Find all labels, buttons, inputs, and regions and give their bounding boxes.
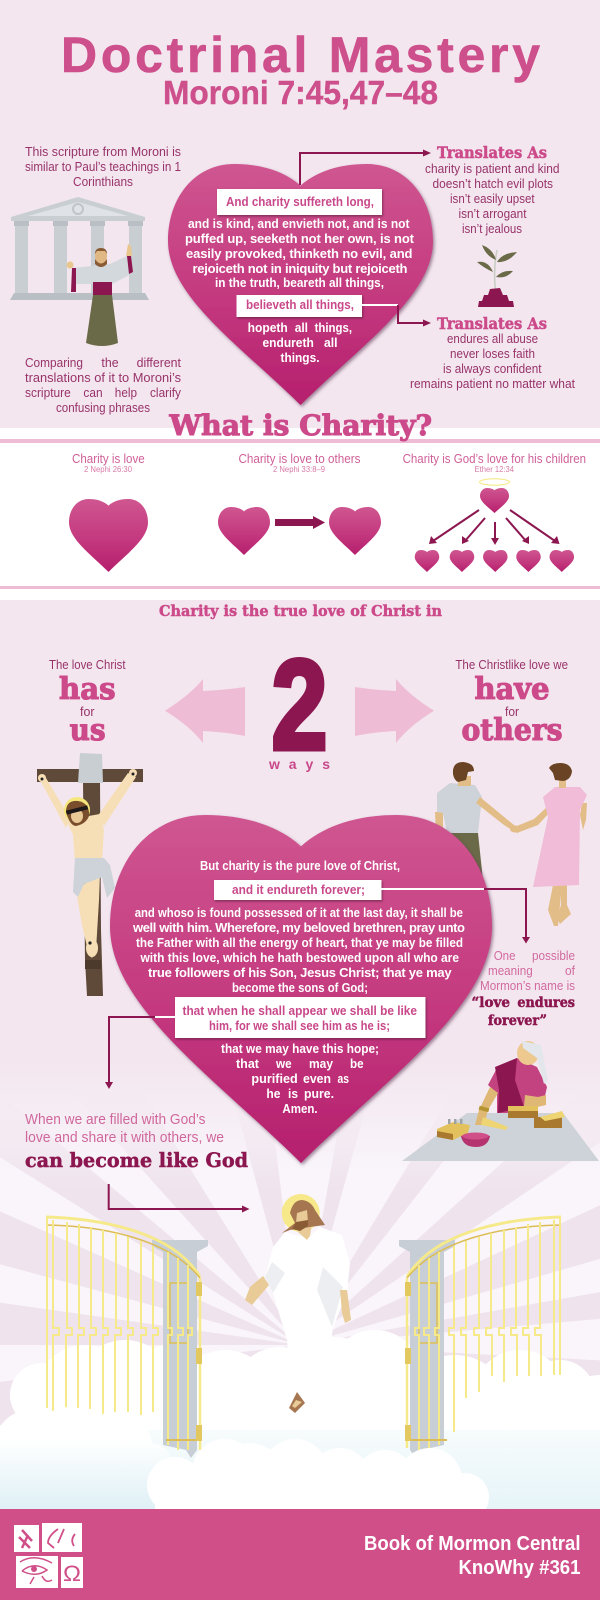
text block: scripture from Moroni: Corinthians [73, 174, 133, 189]
text block: meaning of Mormon's name: possible [532, 948, 575, 963]
verse text [221, 1041, 379, 1116]
verse text: Amen. [282, 1101, 318, 1116]
verse text: pure. [304, 1086, 334, 1101]
verse text [132, 905, 465, 995]
column: charity is love to others: 2 Nephi 33:8–9 [273, 465, 326, 474]
text block: meaning of Mormon's name: One [494, 948, 516, 963]
translation block one: charity is patient and kind [425, 161, 560, 176]
verse text: puffed up, seeketh not her own, is not [185, 231, 415, 246]
highlighted phrase box [214, 880, 382, 900]
text block: comparing translations: can [83, 385, 103, 400]
verse text: and is kind, and envieth not, and is not [188, 216, 410, 231]
verse text: purified [251, 1071, 298, 1086]
verse text: that we may have this hope; [221, 1041, 379, 1056]
verse text: rejoiceth not in iniquity but rejoiceth [192, 261, 408, 276]
text block: can become like God: When we are filled with God’s [25, 1111, 206, 1128]
text block: comparing translations [25, 355, 181, 415]
translation block two: remains patient no matter what [410, 376, 575, 391]
verse text: true followers of his Son, Jesus Christ; that ye may [148, 965, 452, 980]
band rule bottom [0, 586, 600, 589]
column: charity is God's love [403, 451, 586, 572]
text block: Christlike love we have for others: for [505, 704, 520, 719]
icon: resurrected Christ in white robe [245, 1194, 351, 1413]
text block: meaning of Mormon's name: Mormon’s name is [480, 978, 575, 993]
highlighted phrase box: and it endureth forever; [232, 882, 365, 897]
gold panel [170, 1283, 188, 1343]
highlighted phrase box: believeth all things, [246, 297, 354, 312]
bars [47, 1217, 200, 1450]
column: charity is love to others: Charity is love to others [238, 451, 361, 466]
highlighted phrase box: And charity suffereth long, [226, 194, 374, 209]
text block: scripture from Moroni [25, 144, 181, 189]
heart shape [110, 815, 492, 1163]
text block: love Christ has for us: The love Christ [49, 657, 126, 672]
footer text: KnoWhy #361 [458, 1557, 580, 1579]
big number two: ways [268, 756, 330, 772]
woman [510, 763, 587, 926]
title: Moroni 7:45,47–48 [163, 74, 438, 111]
heart panel: pure love of Christ [110, 815, 492, 1163]
verse text: that [236, 1056, 260, 1071]
arrow: right [355, 679, 434, 743]
text block: scripture from Moroni: similar to Paul’s teachings in 1 [25, 159, 181, 174]
arrow: second phrase to second translation [362, 305, 431, 326]
column: charity is love to others [218, 451, 381, 555]
text block: scripture from Moroni: This scripture from Moroni is [25, 144, 181, 159]
translation block two: never loses faith [450, 346, 535, 361]
table [402, 1113, 599, 1161]
highlighted phrase box: him, for we shall see him as he is; [209, 1018, 390, 1033]
text block: meaning of Mormon's name [472, 948, 575, 1029]
sleeves [265, 1262, 285, 1293]
icon: Christ on the cross [37, 753, 143, 996]
highlighted phrase box [175, 997, 426, 1038]
column: charity is love [69, 451, 148, 572]
text block: can become like God [25, 1111, 248, 1172]
arrow: to Christ in heaven [109, 1184, 250, 1212]
verse text: and whoso is found possessed of it at the last day, it shall be [135, 905, 463, 920]
verse text: But charity is the pure love of Christ, [200, 858, 400, 873]
verse text: well with him. Wherefore, my beloved brethren, pray unto [132, 920, 465, 935]
text block: love Christ has for us: has [59, 672, 116, 707]
text block: can become like God: love and share it with others, we [25, 1129, 224, 1146]
verse text: easily provoked, thinketh no evil, and [186, 246, 413, 261]
neck, hair and face [298, 1222, 312, 1240]
footer text [364, 1533, 580, 1579]
highlighted phrase box [217, 189, 382, 215]
column: charity is love: Charity is love [72, 451, 145, 466]
text block: comparing translations: the [101, 355, 119, 370]
arrow: left [165, 679, 245, 743]
text block: comparing translations: different [137, 355, 181, 370]
heaven background: sky and rays [0, 898, 600, 1462]
translation block one: isn’t jealous [462, 221, 522, 236]
clouds behind gates [0, 1330, 600, 1509]
icon: scribe writing at a table [402, 1041, 599, 1161]
verse text: become the sons of God; [232, 980, 368, 995]
highlighted phrase box: that when he shall appear we shall be like [182, 1003, 417, 1018]
text block: comparing translations: confusing phrases [56, 400, 150, 415]
text block: meaning of Mormon's name: “love [472, 995, 510, 1011]
text block: Christlike love we have for others: others [462, 713, 562, 748]
translation block one [425, 143, 560, 236]
logo [14, 1523, 83, 1588]
icon: temple with columns [10, 197, 149, 300]
clouds in front [0, 1407, 172, 1509]
verse text: even [303, 1071, 331, 1086]
text block: love Christ has for us: us [70, 713, 106, 748]
verse text: be [350, 1056, 364, 1071]
translation block one: Translates As [437, 143, 547, 162]
text block: Christlike love we have for others: The Christlike love we [455, 657, 568, 672]
verse text: as [338, 1071, 349, 1086]
text block: meaning of Mormon's name: forever” [488, 1013, 547, 1029]
text block: comparing translations: Comparing [25, 355, 83, 370]
text block: love Christ has for us [49, 657, 126, 748]
cloud in front, centre [147, 1439, 489, 1521]
footer bar [0, 1509, 600, 1600]
heart panel: charity suffereth long [168, 164, 433, 405]
column: charity is love: 2 Nephi 26:30 [84, 465, 133, 474]
translation block one: doesn’t hatch evil plots [432, 176, 553, 191]
title [61, 27, 540, 111]
arrow: phrase to become like God [105, 1017, 175, 1089]
column: charity is God's love: Ether 12:34 [474, 465, 515, 474]
translation block one: isn’t arrogant [458, 206, 527, 221]
translation block two: is always confident [443, 361, 542, 376]
white band [0, 428, 600, 600]
man [435, 762, 519, 890]
verse text: things, [315, 320, 352, 335]
text block: comparing translations: help [115, 385, 137, 400]
highlighted phrase box [236, 295, 362, 317]
logo: Ω [63, 1561, 81, 1586]
verse text: the Father with all the energy of heart, that ye may be filled [136, 935, 463, 950]
gate: right [399, 1217, 561, 1458]
verse text: he [266, 1086, 280, 1101]
text block: Christlike love we have for others [455, 657, 568, 748]
translation block two: Translates As [437, 314, 547, 333]
verse text: all [295, 320, 308, 335]
icon: couple holding hands [435, 762, 587, 926]
robe [265, 1227, 350, 1400]
text block: meaning of Mormon's name: meaning [488, 963, 533, 978]
hands [245, 1276, 269, 1305]
heart shape [168, 164, 433, 405]
sandal [289, 1392, 305, 1413]
panel: what is charity [0, 409, 600, 600]
halo [282, 1194, 320, 1232]
pillar [152, 1240, 208, 1458]
arrow: heart to first translation [300, 150, 431, 185]
big number two: 2 [272, 634, 328, 777]
text block: meaning of Mormon's name: of [565, 963, 575, 978]
verse text: in the truth, beareth all things, [215, 275, 384, 290]
band rule top [0, 439, 600, 443]
verse text [185, 216, 415, 290]
translation block two [410, 314, 575, 391]
text block: comparing translations: scripture [25, 385, 71, 400]
translation block two: endures all abuse [447, 331, 538, 346]
verse text: may [309, 1056, 334, 1071]
verse text: all [324, 335, 338, 350]
gate: left [46, 1217, 208, 1458]
text block: comparing translations: clarify [150, 385, 181, 400]
subheading: true love of Christ: Charity is the true love of Christ in [159, 602, 442, 620]
heading: What is Charity? [168, 409, 432, 442]
figure [488, 1058, 547, 1113]
title: Doctrinal Mastery [61, 27, 540, 83]
text block: can become like God: can become like God [25, 1148, 248, 1172]
verse text: is [288, 1086, 298, 1101]
icon: seedling in soil [477, 245, 517, 307]
verse text: with this love, which he hath bestowed upon all who are [140, 950, 459, 965]
verse text: things. [280, 350, 320, 365]
books and bowl [437, 1122, 470, 1140]
icon: Paul preaching [66, 244, 133, 346]
footer text: Book of Mormon Central [364, 1533, 580, 1555]
text block: meaning of Mormon's name: endures [517, 995, 575, 1011]
top rail [46, 1217, 200, 1277]
text block: love Christ has for us: for [80, 704, 95, 719]
verse text: we [275, 1056, 292, 1071]
verse text: hopeth [248, 320, 288, 335]
translation block one: isn’t easily upset [450, 191, 535, 206]
verse text: endureth [262, 335, 314, 350]
verse text [248, 320, 352, 365]
arrow: endureth forever to Mormon's name [382, 889, 530, 944]
text block: Christlike love we have for others: have [474, 672, 550, 707]
text block: comparing translations: translations of it to Moroni’s [25, 370, 181, 385]
